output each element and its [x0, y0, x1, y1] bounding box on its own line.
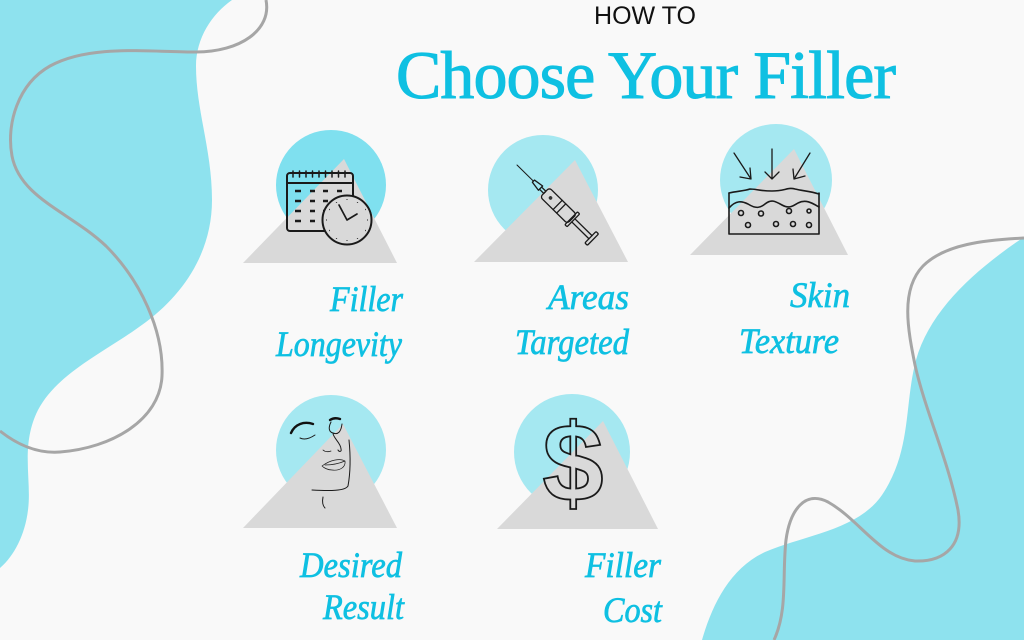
label: filler cost: Filler [584, 545, 662, 585]
panel: desired result [243, 395, 405, 627]
icon: face line drawing [291, 418, 350, 508]
label: filler longevity [275, 279, 404, 364]
curved line: right [774, 238, 1024, 640]
icon: syringe [511, 159, 599, 246]
panel: filler longevity [243, 130, 404, 364]
label: areas targeted [515, 277, 630, 362]
panel: filler cost [497, 394, 663, 630]
panel: areas targeted [474, 135, 630, 362]
panel: skin texture [690, 124, 850, 361]
background blob: left [0, 0, 232, 568]
icon: dollar sign: $ [542, 402, 604, 525]
label: skin texture: Texture [739, 321, 839, 361]
label: desired result: Result [322, 587, 405, 627]
label: skin texture [739, 275, 850, 361]
label: desired result: Desired [299, 545, 403, 585]
label: areas targeted: Areas [546, 277, 629, 317]
icon: skin layers with arrows [729, 149, 819, 234]
label: desired result [299, 545, 405, 627]
label: areas targeted: Targeted [515, 322, 630, 362]
label: filler cost: Cost [603, 590, 663, 630]
icon: calendar and clock [287, 171, 372, 244]
curved line: left [0, 0, 267, 452]
label: skin texture: Skin [790, 275, 850, 315]
label: filler longevity: Filler [329, 279, 404, 319]
heading: how to: HOW TO [594, 2, 696, 30]
background blob: bottom right [702, 237, 1024, 640]
label: filler longevity: Longevity [275, 324, 402, 364]
title: Choose Your Filler [396, 37, 896, 113]
label: filler cost [584, 545, 663, 630]
